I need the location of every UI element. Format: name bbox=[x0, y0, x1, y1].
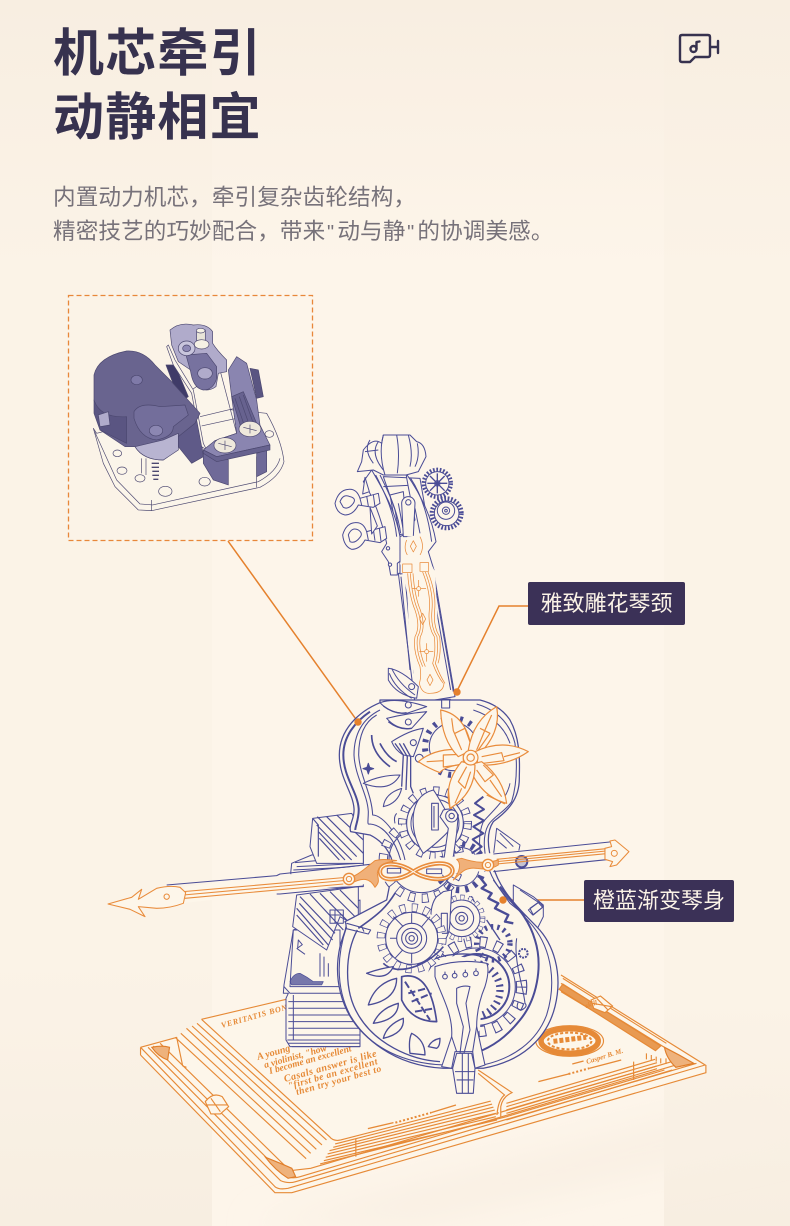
label: body bbox=[584, 880, 734, 922]
lower book bbox=[283, 900, 360, 1047]
left swoosh bbox=[345, 859, 397, 887]
book page text: Casper B. M. bbox=[585, 1047, 624, 1066]
left page edge stripes bbox=[175, 1019, 495, 1159]
pin bbox=[197, 330, 205, 342]
lower leaves bbox=[367, 967, 440, 1055]
book stack behind cello bbox=[283, 813, 543, 1047]
pivot arm bbox=[440, 809, 458, 863]
side gears bbox=[424, 470, 451, 497]
flower bbox=[418, 707, 528, 808]
title line 1: 机芯牵引 bbox=[53, 25, 262, 82]
comb gear bbox=[166, 365, 188, 402]
description text: 精密技艺的巧妙配合，带来"动与静"的协调美感。 bbox=[53, 219, 554, 244]
body silhouette bbox=[338, 700, 558, 1068]
title line 2: 动静相宜 bbox=[53, 89, 262, 146]
gear at right of waist bbox=[437, 843, 483, 890]
centre block bbox=[178, 417, 203, 463]
book page text: I become an excellent bbox=[267, 1044, 353, 1077]
tailpiece bbox=[435, 961, 488, 1068]
scroll head bbox=[357, 435, 426, 475]
tail mask bbox=[398, 956, 483, 1050]
book page text: VERITATIS BONUM bbox=[220, 999, 303, 1030]
label: neck: 雅致雕花琴颈 bbox=[540, 591, 672, 616]
leader dot: neck bbox=[453, 688, 461, 696]
comb bbox=[203, 357, 270, 457]
wax seal bbox=[536, 1026, 604, 1056]
gear under bow bbox=[383, 822, 460, 898]
mounting holes bbox=[113, 431, 274, 496]
fingerboard bbox=[398, 570, 455, 703]
leader lines bbox=[228, 541, 584, 900]
upper gear bbox=[402, 790, 468, 857]
bow orange lines bbox=[183, 848, 610, 898]
open book base bbox=[141, 975, 706, 1193]
bottom page stripes bbox=[320, 1103, 506, 1164]
right behind parts bbox=[493, 828, 520, 857]
leader dot: body upper bbox=[354, 718, 362, 726]
screws bbox=[214, 421, 261, 453]
page top edge bbox=[202, 999, 286, 1019]
book page text: then try your best to bbox=[295, 1064, 383, 1098]
book page text: A young bbox=[255, 1043, 292, 1063]
book page text: skill bbox=[583, 999, 598, 1010]
inner purfling bbox=[343, 712, 370, 830]
upper-left ornament bbox=[372, 735, 397, 767]
book page text bbox=[220, 999, 624, 1098]
bow tip right bbox=[605, 840, 629, 867]
dashed inset frame bbox=[68, 296, 312, 540]
gear behind flower bbox=[425, 718, 482, 775]
scrolled petals bbox=[380, 700, 427, 757]
clasps bbox=[205, 1095, 229, 1114]
end pin bbox=[453, 1053, 475, 1093]
base plate bbox=[93, 407, 284, 511]
right cheek band bbox=[400, 473, 436, 574]
gear right of centre bbox=[441, 898, 482, 939]
mid gear cluster bbox=[477, 927, 510, 960]
label: body: 橙蓝渐变琴身 bbox=[593, 888, 725, 913]
cello neck and head bbox=[335, 435, 461, 708]
orange ornament on neck bbox=[400, 535, 445, 694]
icon: music video bbox=[680, 35, 718, 62]
white strip bbox=[167, 345, 207, 450]
middle flap bbox=[291, 852, 363, 888]
illustrated cover bbox=[290, 930, 340, 987]
book silhouette bbox=[141, 975, 705, 1193]
tuning pegs bbox=[335, 489, 380, 515]
book page text: Casals answer is like bbox=[283, 1048, 379, 1085]
leader dot: body lower bbox=[499, 896, 507, 904]
bow stick bbox=[180, 840, 613, 903]
spring barrel bbox=[94, 351, 200, 460]
spine bbox=[478, 1070, 512, 1117]
right swoosh bbox=[453, 858, 498, 880]
description text bbox=[53, 185, 554, 244]
infinity knot bbox=[343, 858, 498, 887]
top cam bbox=[170, 324, 227, 390]
bow tip left bbox=[108, 886, 186, 917]
gear left large bbox=[381, 908, 442, 969]
toothed strips bbox=[472, 797, 484, 853]
book page text: a violinist, "how bbox=[263, 1044, 329, 1071]
striped middle book bbox=[293, 887, 358, 950]
centre frame bbox=[192, 370, 237, 449]
left cheek band bbox=[363, 470, 402, 575]
spring bbox=[152, 463, 159, 479]
lower large gear bbox=[432, 942, 522, 1032]
upper bout shoulder bbox=[388, 668, 418, 698]
label: neck bbox=[528, 582, 685, 625]
head centre blocks bbox=[383, 477, 430, 537]
footnote rules bbox=[368, 1060, 621, 1129]
thick page band bbox=[559, 984, 661, 1051]
cello body bbox=[338, 700, 558, 1093]
corner ornaments bbox=[152, 1046, 170, 1060]
book page text: "first be an excellent bbox=[287, 1057, 379, 1092]
top slanted book bbox=[310, 813, 363, 863]
description text: 内置动力机芯，牵引复杂齿轮结构， bbox=[53, 185, 416, 210]
curve under gears bbox=[383, 947, 443, 969]
cover outlines bbox=[141, 975, 705, 1189]
bow bbox=[108, 840, 629, 917]
music box mechanism bbox=[93, 324, 284, 511]
bridge squares bbox=[442, 700, 450, 708]
